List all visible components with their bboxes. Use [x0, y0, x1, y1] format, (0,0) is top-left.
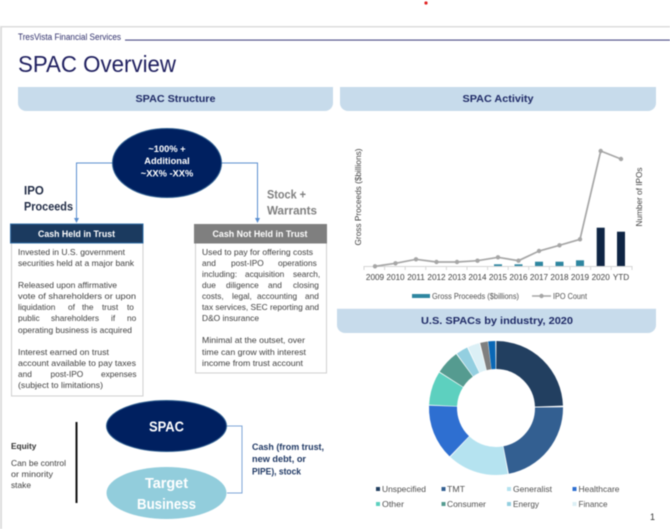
donut legend: TMT — [447, 484, 465, 494]
label: IPO Proceeds — [24, 186, 73, 214]
text block: non-trust details: and — [268, 280, 282, 290]
text block: trust details: if — [111, 313, 116, 323]
text block: trust details: Released upon affirmative — [18, 280, 117, 290]
text block: trust details: to — [127, 302, 134, 312]
text block: Equity: Can be control — [11, 458, 66, 468]
text block: non-trust details: accounting — [257, 291, 298, 301]
text block: trust details: post-IPO — [50, 369, 84, 379]
x axis labels — [366, 273, 629, 282]
x axis labels: 2011 — [407, 273, 425, 282]
text block: non-trust details: and — [202, 258, 216, 268]
text block: non-trust details: D&O insurance — [202, 313, 259, 323]
box header: Cash Not Held in Trust — [212, 229, 308, 239]
arrow: to cash held in trust — [74, 163, 113, 223]
oval: proceeds percentage: ~XX% -XX% — [141, 168, 194, 178]
x axis labels: 2017 — [530, 273, 549, 282]
text block: Equity: or minority — [11, 469, 54, 479]
oval: Target Business — [106, 467, 226, 519]
x axis — [364, 266, 632, 270]
x axis labels: 2019 — [571, 273, 590, 282]
oval: proceeds percentage: Additional — [144, 156, 190, 166]
oval: Target Business: Business — [137, 496, 196, 513]
panel heading: SPAC Activity — [340, 87, 656, 111]
text block: Equity: stake — [11, 480, 31, 490]
box header — [10, 224, 143, 243]
text block: trust details: vote of shareholders or upon — [18, 291, 136, 301]
donut legend: Other — [382, 499, 404, 509]
text block: non-trust details: income from trust account — [202, 358, 304, 368]
bars: gross proceeds — [494, 228, 625, 266]
text block: non-trust details: diligence — [226, 280, 259, 290]
text block: non-trust details: closing — [293, 280, 319, 290]
chart: SPAC activity — [353, 148, 644, 301]
chart legend: IPO Count — [553, 291, 588, 301]
page number: 1 — [650, 512, 655, 522]
box header — [194, 224, 327, 244]
oval: SPAC: SPAC — [149, 418, 184, 436]
x axis labels: YTD — [613, 273, 629, 282]
divider: equity bar — [76, 422, 78, 503]
x axis labels: 2014 — [468, 273, 487, 282]
x axis labels: 2020 — [592, 273, 610, 282]
label: Stock + Warrants: Warrants — [267, 206, 317, 218]
x axis labels: 2012 — [427, 273, 446, 282]
text block: non-trust details: and — [305, 291, 319, 301]
text block: trust details: account available to pay taxes — [18, 358, 136, 368]
label: cash consideration: new debt, or — [252, 454, 306, 464]
chart legend: Gross Proceeds ($billions) — [432, 291, 519, 301]
company name header: TresVista Financial Services — [18, 32, 121, 42]
chart: industry donut — [421, 333, 571, 483]
text block: non-trust details: Used to pay for offering costs — [202, 247, 313, 257]
label: IPO Proceeds: Proceeds — [24, 202, 73, 214]
text block: trust details: trust — [102, 302, 119, 312]
text block: non-trust details: due — [202, 280, 216, 290]
text block: non-trust details — [202, 247, 320, 368]
donut legend: Healthcare — [578, 484, 620, 494]
panel: SPAC structure flow — [24, 128, 317, 223]
text block: trust details: and — [18, 369, 32, 379]
connector: SPAC to target — [227, 426, 242, 493]
line: IPO count — [373, 149, 623, 268]
donut legend: Finance — [578, 499, 608, 509]
label: Stock + Warrants — [267, 190, 317, 218]
x axis labels: 2013 — [448, 273, 467, 282]
text block: non-trust details: legal, — [232, 291, 252, 301]
oval: Target Business: Target — [145, 475, 188, 492]
text block: trust details: expenses — [101, 369, 137, 379]
panel heading: U.S. SPACs by industry: U.S. SPACs by industry, 2020 — [421, 315, 573, 327]
oval: proceeds percentage: ~100% + — [148, 144, 186, 154]
y axis title: number of IPOs: Number of IPOs — [634, 168, 644, 226]
text block: non-trust details: operations — [278, 258, 317, 268]
text block: non-trust details: time can grow with interest — [202, 347, 307, 357]
text block: Equity: Equity — [11, 441, 37, 451]
arrow: to cash not held in trust — [221, 163, 260, 223]
donut legend: Generalist — [513, 484, 553, 494]
x axis labels: 2018 — [550, 273, 569, 282]
text block: trust details: public — [18, 313, 40, 323]
donut legend: Unspecified — [382, 484, 426, 494]
text block: trust details: securities held at a major bank — [18, 258, 135, 268]
x axis labels: 2016 — [509, 273, 528, 282]
text block: trust details: (subject to limitations) — [18, 380, 103, 390]
panel heading: SPAC Structure: SPAC Structure — [136, 93, 216, 105]
label: IPO Proceeds: IPO — [24, 186, 44, 198]
text block: non-trust details: acquisition — [245, 269, 285, 279]
label: cash consideration: Cash (from trust, — [252, 442, 324, 452]
donut legend: Energy — [513, 499, 540, 509]
text block: trust details: Invested in U.S. government — [18, 247, 126, 257]
text block: non-trust details: search, — [293, 269, 320, 279]
label: cash consideration — [252, 442, 324, 476]
text block: trust details: no — [127, 313, 137, 323]
text block: trust details: Interest earned on trust — [18, 347, 110, 357]
x axis labels: 2015 — [489, 273, 508, 282]
text block: non-trust details: tax services, SEC reporting and — [202, 302, 319, 312]
text block: non-trust details: Minimal at the outset, over — [202, 335, 305, 345]
box header: Cash Held in Trust — [38, 229, 115, 239]
donut legend: Consumer — [447, 499, 486, 509]
text block: trust details: of — [68, 302, 76, 312]
text block: trust details: the — [82, 302, 94, 312]
text block: trust details: shareholders — [51, 313, 99, 323]
text block: trust details: liquidation — [18, 302, 56, 312]
label: Stock + Warrants: Stock + — [267, 190, 306, 202]
text block: trust details: operating business is acquired — [18, 325, 132, 335]
y axis title: gross proceeds: Gross Proceeds ($billions) — [353, 148, 363, 246]
oval: proceeds percentage — [112, 128, 222, 198]
panel: Cash Held in Trust — [10, 224, 143, 396]
x axis labels: 2009 — [366, 273, 385, 282]
text block: trust details — [18, 247, 137, 390]
oval: SPAC — [106, 400, 226, 452]
title: SPAC Overview — [18, 51, 176, 77]
chart legend — [412, 291, 588, 301]
text block: non-trust details: post-IPO — [231, 258, 264, 268]
panel: Cash Not Held in Trust — [194, 224, 327, 373]
panel heading: SPAC Structure — [18, 87, 333, 111]
text block: non-trust details: including: — [202, 269, 237, 279]
x axis labels: 2010 — [386, 273, 405, 282]
panel heading: U.S. SPACs by industry — [337, 309, 656, 333]
label: cash consideration: PIPE), stock — [252, 466, 302, 476]
donut legend — [376, 484, 620, 509]
panel heading: SPAC Activity: SPAC Activity — [462, 93, 534, 105]
text block: Equity — [11, 441, 66, 490]
text block: non-trust details: costs, — [202, 291, 224, 301]
